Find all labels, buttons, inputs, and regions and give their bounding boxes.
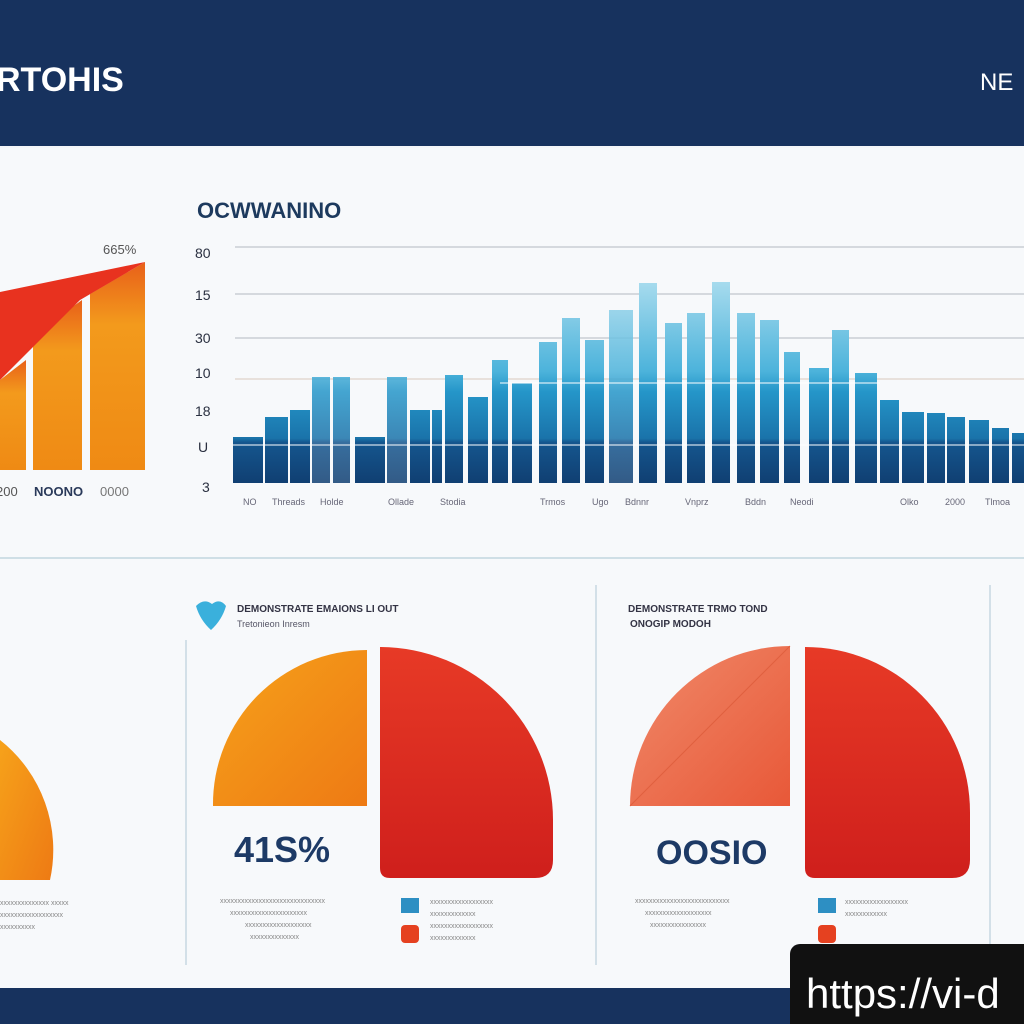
left orange growth chart: NOONO	[34, 484, 83, 499]
panel 2: pie: xxxxxxxxxxxxxxxxxxx	[245, 922, 312, 929]
stat: OOSIO: OOSIO	[656, 834, 767, 872]
blue bar chart	[233, 282, 1024, 483]
panel 1: left pie: xxxxxxxxxx	[0, 924, 36, 931]
grid lines	[235, 247, 1024, 379]
y axis labels: 3	[202, 479, 210, 495]
y axis labels: 80	[195, 245, 211, 261]
panel 3: pie: xxxxxxxxxxxxxxxxxxx	[645, 910, 712, 917]
panel 3: pie: xxxxxxxxxxxxxxxx	[650, 922, 706, 929]
panel dividers	[186, 585, 990, 965]
left orange growth chart: 665%	[103, 242, 137, 257]
x axis labels: Neodi	[790, 497, 814, 507]
x axis labels: Vnprz	[685, 497, 709, 507]
left orange growth chart: 0000	[100, 484, 129, 499]
x axis labels: Stodia	[440, 497, 466, 507]
panel 2: pie: xxxxxxxxxxxxxxxxxx	[430, 899, 494, 906]
x axis labels: Olko	[900, 497, 919, 507]
panel 1: left pie: xxxxxxxxxxxxxxxxxx	[0, 912, 64, 919]
watermark	[790, 944, 1024, 1024]
header bar	[0, 0, 1024, 146]
x axis labels: Tlmoa	[985, 497, 1010, 507]
panel 3: pie: ONOGIP MODOH	[630, 619, 711, 630]
y axis labels: 30	[195, 330, 211, 346]
panel 3: pie: DEMONSTRATE TRMO TOND	[628, 604, 768, 615]
y axis labels: U	[198, 439, 208, 455]
x axis labels: Bddn	[745, 497, 766, 507]
panel 2: pie: DEMONSTRATE EMAIONS LI OUT	[237, 604, 398, 615]
red trend wedge	[0, 262, 145, 380]
x axis labels: Holde	[320, 497, 344, 507]
panel 2: pie: xxxxxxxxxxxxxxxxxxxxxx	[230, 910, 308, 917]
panel 2: pie: xxxxxxxxxxxxxxxxxx	[430, 923, 494, 930]
x axis labels: Ugo	[592, 497, 609, 507]
panel 2: pie	[196, 601, 553, 943]
panel 2: pie: xxxxxxxxxxxxxxxxxxxxxxxxxxxxxx	[220, 898, 326, 905]
y axis labels	[195, 245, 211, 495]
stat: 41S%: 41S%	[234, 829, 330, 870]
bar chart title: OCWWANINO	[197, 198, 341, 223]
legend	[401, 898, 419, 913]
panel 3: pie	[628, 604, 970, 943]
panel 2: pie: Tretonieon Inresm	[237, 619, 310, 629]
x axis labels: Trmos	[540, 497, 566, 507]
panel 3: pie: xxxxxxxxxxxx	[845, 911, 888, 918]
panel 3: pie: xxxxxxxxxxxxxxxxxxxxxxxxxxx	[635, 898, 730, 905]
panel 2: pie: xxxxxxxxxxxxx	[430, 935, 476, 942]
panel 3: pie: xxxxxxxxxxxxxxxxxx	[845, 899, 908, 906]
left orange growth chart	[0, 242, 145, 499]
watermark: https://vi-d	[806, 970, 1000, 1017]
section divider	[0, 557, 1024, 559]
x axis labels: NO	[243, 497, 256, 507]
panel 2: pie: xxxxxxxxxxxxx	[430, 911, 476, 918]
footer bar	[0, 988, 1024, 1024]
x axis labels: Ollade	[388, 497, 414, 507]
x axis labels: Bdnnr	[625, 497, 649, 507]
x axis labels	[243, 497, 1010, 507]
icon: heart	[196, 601, 226, 630]
panel 2: pie: xxxxxxxxxxxxxx	[250, 934, 300, 941]
y axis labels: 15	[195, 287, 211, 303]
x axis labels: 2000	[945, 497, 965, 507]
header right label: NE	[980, 69, 1013, 96]
x axis labels: Threads	[272, 497, 306, 507]
y axis labels: 18	[195, 403, 211, 419]
panel 1: left pie	[0, 740, 69, 931]
y axis labels: 10	[195, 365, 211, 381]
panel 1: left pie: xxxxxxxxxxxxxx xxxxx	[0, 900, 69, 907]
